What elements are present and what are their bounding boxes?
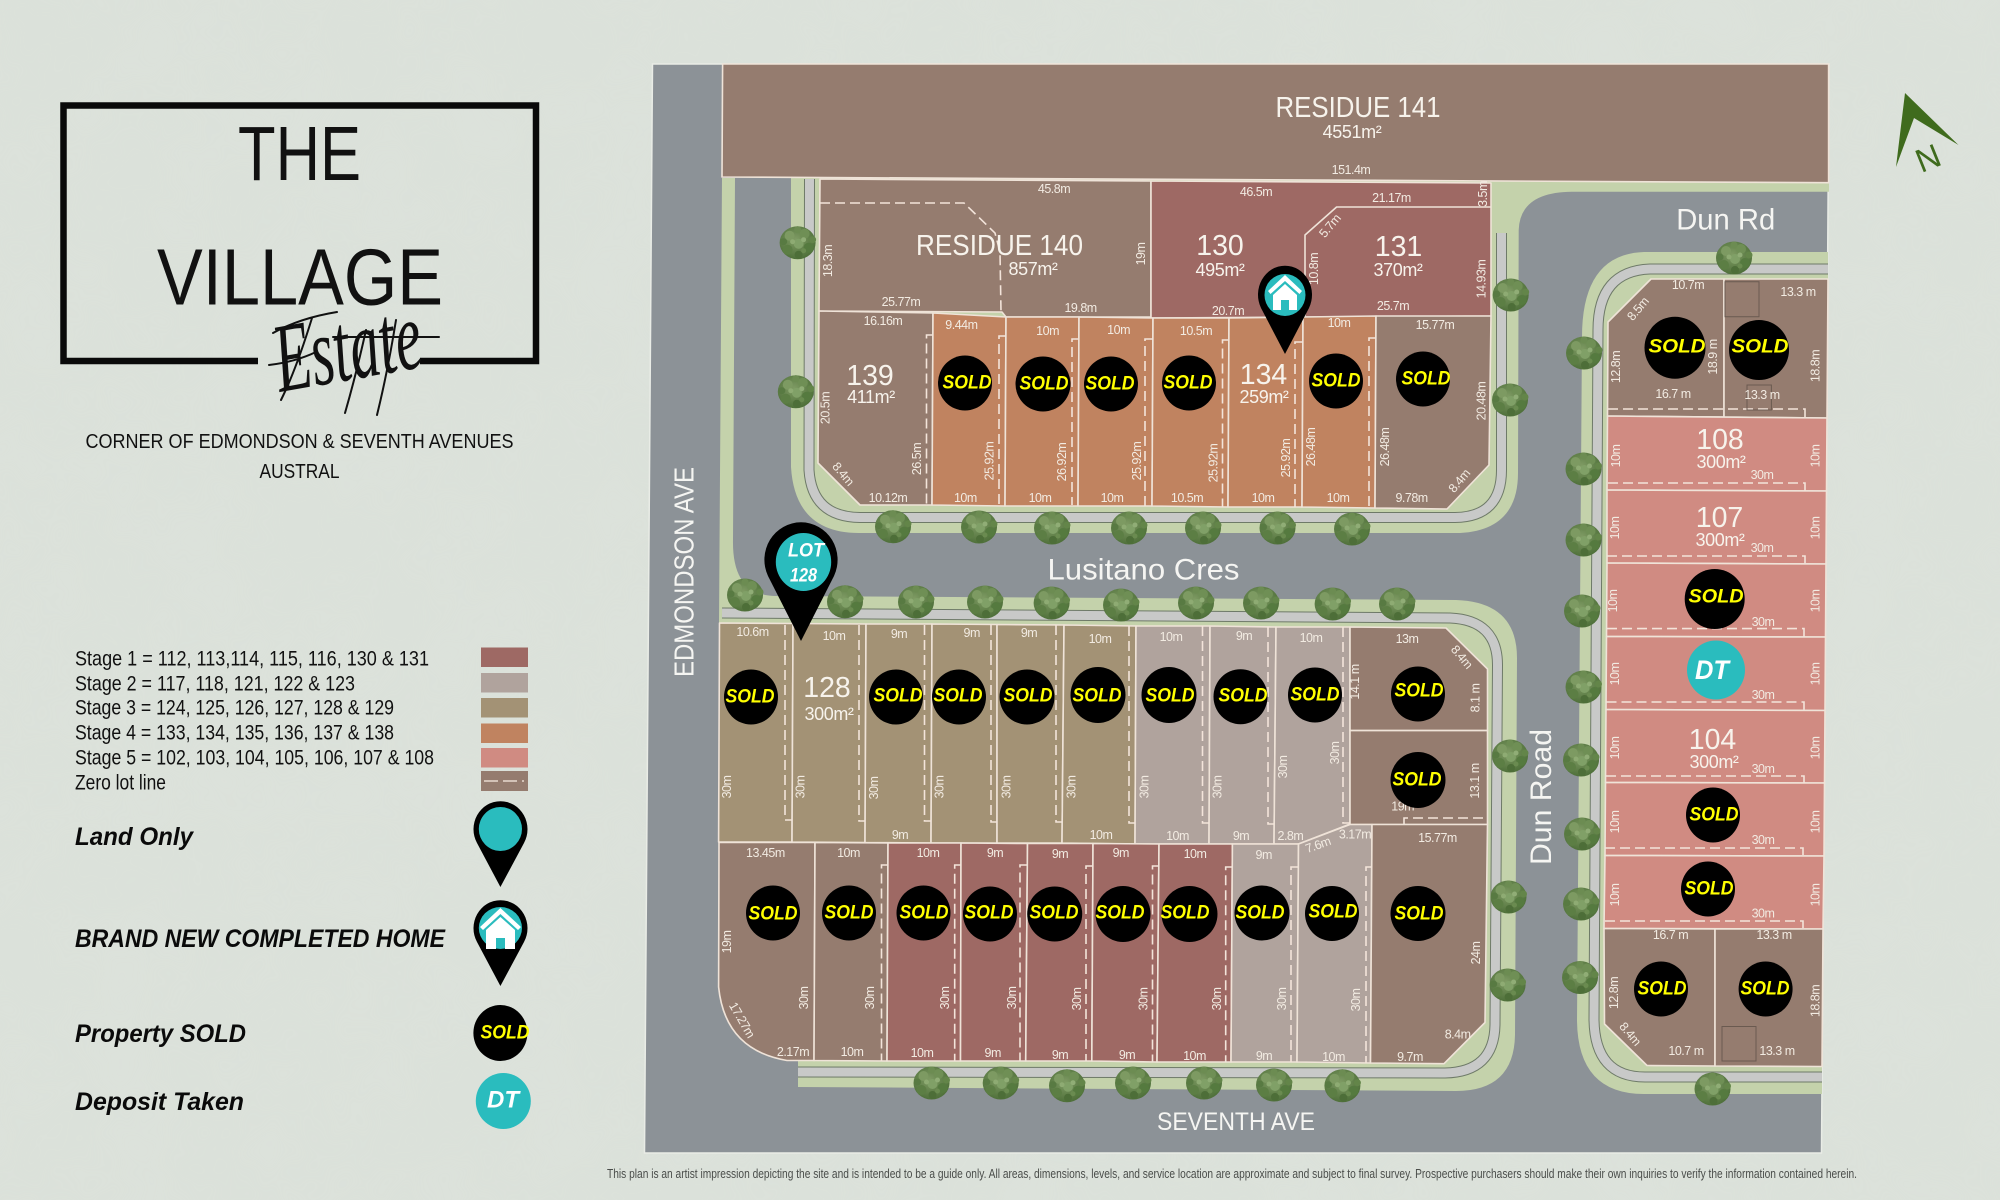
title: THE: THE xyxy=(238,111,361,197)
lot dimensions: 30m xyxy=(1211,776,1225,798)
lot dimensions: 10m xyxy=(1183,1049,1206,1063)
lot dimensions: 12.8m xyxy=(1607,977,1621,1009)
lot dimensions: 10m xyxy=(1322,1050,1345,1064)
lots: bottom block row 2 xyxy=(719,824,1488,1064)
lot dimensions: 30m xyxy=(1752,615,1774,629)
lot dimensions: 15.77m xyxy=(1416,318,1454,332)
lot dimensions: 10m xyxy=(1809,737,1823,759)
verge and footpath: bottom block xyxy=(719,178,1517,1091)
legend: land only xyxy=(75,801,527,887)
lot dimensions: 14.1 m xyxy=(1348,664,1362,700)
lot dimensions: 10.5m xyxy=(1171,491,1203,505)
lot dimensions: 10m xyxy=(1809,517,1823,539)
lot: residue 140 xyxy=(819,179,1151,317)
legend: stage 3: Stage 3 = 124, 125, 126, 127, 128 & 129 xyxy=(75,696,394,720)
lot dimensions: 19m xyxy=(720,931,734,953)
sold badge: row 2 lot 6 xyxy=(1096,886,1150,942)
lot dimensions: 10.7 m xyxy=(1668,1044,1704,1058)
sold badge: lot 106: SOLD xyxy=(1688,586,1744,608)
sold badge: row 1 upper corner xyxy=(1391,666,1445,722)
lot dimensions: 26.48m xyxy=(1378,428,1392,466)
lot dimensions: 13.3 m xyxy=(1756,928,1792,942)
lot dimensions: 30m xyxy=(1070,988,1084,1010)
lot dimensions: 10m xyxy=(1328,316,1350,330)
lot dimensions: 25.7m xyxy=(1377,299,1409,313)
lot dimensions: 12.8m xyxy=(1609,351,1623,383)
lot dimensions: 18.9 m xyxy=(1706,339,1720,375)
sold badge: row 2 lot 6: SOLD xyxy=(1096,902,1145,924)
lot dimensions: 2.8m xyxy=(1278,829,1303,843)
lot dimensions: 30m xyxy=(1210,988,1224,1010)
sold badge: row 2 lot 2: SOLD xyxy=(824,902,874,924)
lot dimensions: 151.4m xyxy=(1332,163,1370,177)
lot dimensions: 46.5m xyxy=(1240,185,1272,199)
legend: zero lot line: Zero lot line xyxy=(75,772,166,794)
lot numbers and areas: RESIDUE 141 xyxy=(1276,92,1440,124)
legend: deposit taken: Deposit Taken xyxy=(75,1088,244,1116)
lot dimensions: 9.44m xyxy=(945,318,978,332)
lot dimensions: 9.7m xyxy=(1397,1050,1423,1064)
lot dimensions: 30m xyxy=(1137,988,1151,1010)
lot numbers and areas: 128 xyxy=(803,672,851,704)
lot dimensions: 8.5m xyxy=(1624,295,1652,323)
lot dimensions: 10m xyxy=(1809,445,1823,467)
lot dimensions: 7.6m xyxy=(1303,834,1333,856)
lot dimensions: 13.3 m xyxy=(1744,388,1780,402)
lot dimensions: 26.48m xyxy=(1304,428,1318,466)
legend: deposit taken: DT xyxy=(487,1086,521,1114)
lot dimensions: 10.6m xyxy=(736,625,769,639)
lot dimensions: 20.5m xyxy=(819,392,833,424)
sold badge: row 2 lot 3: SOLD xyxy=(900,902,949,924)
sold badge: lot 102: SOLD xyxy=(1684,878,1734,900)
lot dimensions: 18.8m xyxy=(1809,985,1823,1017)
lot numbers and areas: 411m² xyxy=(847,387,895,407)
lot dimensions: 30m xyxy=(1751,541,1773,555)
legend: property sold: SOLD xyxy=(480,1022,530,1044)
legend xyxy=(75,648,531,1129)
sold badge: row 1 lot 4 xyxy=(932,670,986,724)
title frame xyxy=(64,106,536,361)
sold badge: top row lot 4 xyxy=(1162,356,1216,410)
legend: property sold: Property SOLD xyxy=(75,1020,246,1048)
lot dimensions: 25.77m xyxy=(882,295,920,309)
title: Estate script xyxy=(264,282,439,415)
street trees xyxy=(727,226,1752,1105)
sold badge: row 1 lot 9: SOLD xyxy=(1290,684,1340,706)
lot dimensions: 10m xyxy=(1608,811,1622,833)
lot dimensions: 30m xyxy=(1751,468,1773,482)
map pin: lot 128 land only xyxy=(764,522,838,641)
lot dimensions: 10m xyxy=(837,846,860,860)
lot dimensions: 10m xyxy=(1327,491,1349,505)
lot dimensions: 2.17m xyxy=(777,1045,809,1059)
lot dimensions: 10m xyxy=(1090,828,1112,842)
sold badge: row 2 lot 7 xyxy=(1160,886,1218,942)
lot numbers and areas: 259m² xyxy=(1239,387,1289,407)
lot dimensions: 30m xyxy=(797,987,811,1009)
sold badge: right block top left: SOLD xyxy=(1648,336,1706,358)
sold badge: row 2 lot 1 xyxy=(746,886,800,940)
lot dimensions: 10m xyxy=(1606,590,1620,612)
lot dimensions: 25.92m xyxy=(1207,444,1221,482)
map pin: lot 128 land only: LOT xyxy=(788,540,825,562)
lots: top row stage 4 xyxy=(818,311,1491,509)
lot dimensions: 8.4m xyxy=(1446,467,1473,495)
lot dimensions: 30m xyxy=(1752,833,1774,847)
lot dimensions: 10m xyxy=(1809,811,1823,833)
sold badge: row 1 lot 3: SOLD xyxy=(874,686,923,706)
lot numbers and areas: 300m² xyxy=(804,704,854,724)
sold badge: lot 102 xyxy=(1681,862,1735,916)
suburb line: AUSTRAL xyxy=(260,461,340,483)
sold badge: row 2 lot 4 xyxy=(963,886,1017,942)
lot dimensions: 20.7m xyxy=(1212,304,1244,318)
sold badge: row 1 lot 6: SOLD xyxy=(1072,686,1122,706)
lot dimensions: 30m xyxy=(794,776,808,798)
sold badge: row 2 lot 5 xyxy=(1027,886,1082,942)
lot dimensions: 10m xyxy=(823,629,845,643)
lot dimensions: 26.92m xyxy=(1055,443,1069,481)
lot dimensions: 10m xyxy=(1160,630,1182,644)
legend: brand new completed home xyxy=(75,900,527,986)
road base xyxy=(644,64,1829,1153)
sold badge: row 1 lot 7 xyxy=(1142,667,1196,723)
lot dimensions: 10.8m xyxy=(1307,253,1321,285)
lot dimensions: 10m xyxy=(1608,517,1622,539)
lot dimensions: 9m xyxy=(1256,1049,1272,1063)
lot dimensions: 10.7m xyxy=(1672,278,1704,292)
legend: property sold xyxy=(75,1005,530,1061)
lot dimensions: 13.45m xyxy=(746,846,785,860)
legend: brand new completed home: BRAND NEW COMPLETED HOME xyxy=(75,925,446,953)
map pin: brand new completed home on lot 134 xyxy=(1258,266,1312,354)
lot dimensions: 10m xyxy=(1608,737,1622,759)
verge and footpath: top block xyxy=(791,178,1829,533)
sold badge: row 1 lot 3 xyxy=(869,670,923,724)
lot dimensions: 30m xyxy=(1752,906,1774,920)
lot dimensions: 9m xyxy=(1113,846,1129,860)
map pin: lot 128 land only: 128 xyxy=(790,566,817,586)
sold badge: right block top right: SOLD xyxy=(1732,336,1789,358)
legend: stage 2: Stage 2 = 117, 118, 121, 122 & 123 xyxy=(75,672,355,696)
sold badge: row 2 lot 4: SOLD xyxy=(964,902,1014,924)
lot dimensions: 10m xyxy=(1101,491,1123,505)
verge and footpath: right block xyxy=(1577,252,1828,1094)
sold badges xyxy=(724,317,1793,1016)
lot dimensions: 19m xyxy=(1134,243,1148,265)
lot numbers and areas: RESIDUE 140 xyxy=(916,230,1083,262)
sold badge: row 2 lot 2 xyxy=(822,886,876,940)
sold badge: right block lower right: SOLD xyxy=(1740,978,1790,1000)
lot dimensions: 10m xyxy=(1184,847,1206,861)
lot dimensions: 9m xyxy=(1256,848,1272,862)
lot numbers and areas: 134 xyxy=(1240,359,1287,391)
sold badge: row 2 lot 9: SOLD xyxy=(1308,902,1358,922)
road names xyxy=(668,204,1775,1136)
sold badge: row 1 upper corner: SOLD xyxy=(1394,680,1444,702)
deposit taken badge: lot 105: DT xyxy=(1695,655,1731,685)
sold badge: top row lot 6: SOLD xyxy=(1312,370,1361,392)
lot dimensions: 30m xyxy=(1138,776,1152,798)
sold badge: row 1 lot 1 xyxy=(724,670,778,724)
sold badge: top row corner lot: SOLD xyxy=(1402,368,1451,390)
lot dimensions: 9m xyxy=(1052,847,1068,861)
sold badge: right block top left xyxy=(1644,317,1706,379)
lot dimensions: 10m xyxy=(1809,590,1823,612)
lot dimensions: 9m xyxy=(1052,1048,1068,1062)
lot dimensions: 10.12m xyxy=(869,491,907,505)
lot dimensions: 8.4m xyxy=(1616,1020,1644,1048)
lot numbers and areas: 131 xyxy=(1375,231,1422,263)
lot dimensions: 17.27m xyxy=(726,1000,758,1040)
lot dimensions: 16.16m xyxy=(864,314,902,328)
title: Estate script: Estate xyxy=(264,282,430,414)
lot dimensions: 5.7m xyxy=(1316,212,1344,240)
lot dimensions: 13m xyxy=(1396,632,1418,646)
sold badge: top row lot 3 xyxy=(1084,356,1138,412)
lot numbers and areas: 104 xyxy=(1689,724,1736,756)
lot dimensions: 19m xyxy=(1391,800,1414,814)
lot dimensions: 10m xyxy=(1809,884,1823,906)
sold badge: top row lot 1: SOLD xyxy=(942,372,992,394)
lot dimensions: 14.93m xyxy=(1475,260,1489,298)
lot dimensions: 9m xyxy=(1021,626,1037,640)
lot dimensions: 20.48m xyxy=(1475,382,1489,420)
sold badge: row 1 lot 5: SOLD xyxy=(1004,686,1053,706)
sold badge: top row lot 1 xyxy=(938,356,992,410)
lot numbers and areas: 300m² xyxy=(1689,752,1739,772)
lot dimensions: 30m xyxy=(867,777,881,799)
lot dimensions: 8.4m xyxy=(1448,643,1475,671)
lot numbers and areas: 107 xyxy=(1696,502,1743,534)
lot dimensions: 18.8m xyxy=(1809,350,1823,382)
lot dimensions: 13.1 m xyxy=(1468,763,1482,799)
lots: right block xyxy=(1604,279,1828,1066)
sold badge: lot 103 xyxy=(1686,788,1740,842)
lot dimensions: 13.3 m xyxy=(1780,285,1816,299)
lot numbers and areas: 108 xyxy=(1696,424,1744,456)
legend: stage 1: Stage 1 = 112, 113,114, 115, 116, 130 & 131 xyxy=(75,648,429,670)
sold badge: row 1 lot 9 xyxy=(1288,668,1342,722)
lot dimensions: 10m xyxy=(1608,884,1622,906)
lot dimensions: 15.77m xyxy=(1418,831,1457,845)
lot dimensions: 25.92m xyxy=(1130,442,1144,480)
sold badge: top row lot 6 xyxy=(1309,354,1363,408)
lot dimensions: 30m xyxy=(1275,988,1289,1010)
lot dimensions: 8.4m xyxy=(1445,1028,1471,1042)
legend: stage 4: Stage 4 = 133, 134, 135, 136, 137 & 138 xyxy=(75,722,394,744)
road name: Edmondson Ave: EDMONDSON AVE xyxy=(668,467,700,677)
site plan map xyxy=(644,64,1829,1153)
road name: Dun Road: Dun Road xyxy=(1525,729,1558,865)
sold badge: top row lot 2 xyxy=(1016,356,1070,412)
lot dimensions: 10m xyxy=(911,1046,933,1060)
sold badge: row 1 lot 8 xyxy=(1214,669,1268,724)
lot dimensions: 9m xyxy=(891,627,907,641)
north arrow xyxy=(1896,93,1958,180)
lot dimensions: 10m xyxy=(1609,445,1623,467)
sold badge: top row lot 3: SOLD xyxy=(1086,374,1135,394)
lot numbers and areas: 300m² xyxy=(1695,530,1745,550)
lot numbers and areas: 4551m² xyxy=(1323,122,1382,142)
lot dimensions: 10m xyxy=(1029,491,1051,505)
lot dimensions: 10m xyxy=(1036,324,1059,338)
sold badge: row 2 lot 8: SOLD xyxy=(1236,902,1285,924)
lot dimensions: 30m xyxy=(1005,987,1019,1009)
sold badge: row 1 lot 1: SOLD xyxy=(726,686,775,708)
sold badge: row 1 lower corner: SOLD xyxy=(1392,770,1442,790)
lot dimensions: 9m xyxy=(987,846,1003,860)
lot dimensions: 10m xyxy=(1089,632,1111,646)
sold badge: row 2 lot 3 xyxy=(896,886,950,940)
lot dimensions: 30m xyxy=(720,776,734,798)
sold badge: row 2 lot 7: SOLD xyxy=(1160,902,1210,924)
lot dimensions: 3.17m xyxy=(1339,828,1371,842)
lot dimensions: 30m xyxy=(1000,776,1014,798)
title: VILLAGE: VILLAGE xyxy=(157,232,443,322)
lot numbers and areas: 139 xyxy=(846,360,894,392)
lot dimensions: 9.78m xyxy=(1395,491,1428,505)
lot dimensions: 24m xyxy=(1469,942,1483,964)
lot numbers and areas: 495m² xyxy=(1195,260,1245,280)
lots: 130 and 131 xyxy=(1151,181,1491,318)
lot dimensions: 30m xyxy=(1276,756,1290,778)
sold badge: row 1 lower corner xyxy=(1390,752,1446,808)
lot dimensions: 9m xyxy=(1119,1048,1135,1062)
lot dimensions: 3.5m xyxy=(1476,181,1490,207)
sold badge: row 2 lot 5: SOLD xyxy=(1030,902,1079,924)
lot dimensions: 10m xyxy=(1252,491,1274,505)
lot dimensions: 30m xyxy=(933,776,947,798)
sold badge: right block lower left: SOLD xyxy=(1638,978,1687,1000)
sold badge: row 2 corner xyxy=(1390,886,1446,941)
lot dimensions: 10m xyxy=(1809,663,1823,685)
lot dimensions: 30m xyxy=(1752,688,1774,702)
lot dimensions: 26.5m xyxy=(910,443,924,475)
lot dimensions: 30m xyxy=(938,987,952,1009)
sold badge: row 2 corner: SOLD xyxy=(1394,904,1444,924)
lot dimensions: 16.7 m xyxy=(1655,387,1691,401)
sold badge: right block top right xyxy=(1729,320,1789,380)
sold badge: top row lot 4: SOLD xyxy=(1164,372,1213,394)
lot dimensions: 10m xyxy=(1300,631,1322,645)
sold badge: row 2 lot 9 xyxy=(1305,886,1359,941)
legend: stage 5: Stage 5 = 102, 103, 104, 105, 106, 107 & 108 xyxy=(75,746,434,770)
lot dimensions: 8.1 m xyxy=(1468,684,1482,712)
lot: residue 141 xyxy=(722,64,1829,183)
lot dimensions: 19.8m xyxy=(1064,301,1097,315)
sold badge: lot 103: SOLD xyxy=(1690,804,1739,826)
road name: Seventh Ave: SEVENTH AVE xyxy=(1157,1108,1315,1136)
lot dimensions: 9m xyxy=(1233,829,1249,843)
lot dimensions: 25.92m xyxy=(983,442,997,480)
sold badge: row 1 lot 8: SOLD xyxy=(1218,686,1268,706)
sold badge: row 2 lot 8 xyxy=(1234,886,1290,940)
road name: Lusitano Cres: Lusitano Cres xyxy=(1048,554,1240,586)
lot dimensions: 10m xyxy=(1107,323,1130,337)
sold badge: row 2 lot 1: SOLD xyxy=(748,904,798,924)
sold badge: right block lower left xyxy=(1634,962,1688,1016)
lot dimensions: 10.5m xyxy=(1180,324,1212,338)
sold badge: top row corner lot xyxy=(1396,352,1451,406)
lot dimensions: 10m xyxy=(954,491,977,505)
lot dimensions: 9m xyxy=(1236,629,1252,643)
sold badge: right block lower right xyxy=(1739,962,1793,1016)
lot dimensions: 10m xyxy=(1166,829,1189,843)
sold badge: row 1 lot 4: SOLD xyxy=(934,686,983,706)
lot dimensions: 30m xyxy=(863,987,877,1009)
lot dimensions: 10m xyxy=(841,1045,863,1059)
lot dimensions: 9m xyxy=(892,828,908,842)
lot dimensions: 30m xyxy=(1328,742,1342,764)
lot dimensions: 10m xyxy=(917,846,939,860)
lot dimensions: 21.17m xyxy=(1372,191,1411,205)
sold badge: row 1 lot 6 xyxy=(1070,667,1126,723)
lot numbers and areas: 857m² xyxy=(1008,259,1058,279)
lot dimensions: 30m xyxy=(1752,762,1774,776)
legend: zero lot line xyxy=(75,771,528,794)
lot dimensions: 30m xyxy=(1349,989,1363,1011)
address line: CORNER OF EDMONDSON & SEVENTH AVENUES xyxy=(86,431,514,453)
sold badge: lot 106 xyxy=(1685,569,1745,629)
lot numbers and areas: 370m² xyxy=(1373,260,1423,280)
legend: deposit taken xyxy=(75,1073,531,1129)
sold badge: row 1 lot 7: SOLD xyxy=(1146,686,1195,706)
lot dimensions: 16.7 m xyxy=(1653,928,1688,942)
lot dimensions: 10m xyxy=(1608,663,1622,685)
north arrow: N xyxy=(1910,136,1946,180)
deposit taken badge: lot 105 xyxy=(1687,640,1745,700)
lot numbers and areas: 300m² xyxy=(1696,452,1746,472)
lot dimensions: 13.3 m xyxy=(1759,1044,1795,1058)
sold badge: top row lot 2: SOLD xyxy=(1020,374,1069,394)
lots: bottom block row 1 xyxy=(719,623,1488,844)
title block: The Village Estate xyxy=(64,106,536,483)
lot dimensions: 25.92m xyxy=(1279,439,1293,477)
lot dimensions xyxy=(720,163,1823,1064)
lot dimensions: 45.8m xyxy=(1038,182,1070,196)
legend: land only: Land Only xyxy=(75,823,194,851)
lot dimensions: 9m xyxy=(985,1046,1001,1060)
road name: Dun Rd: Dun Rd xyxy=(1676,204,1775,236)
lot dimensions: 8.4m xyxy=(829,460,857,488)
lot numbers and areas xyxy=(803,92,1746,772)
lot dimensions: 30m xyxy=(1065,776,1079,798)
lot numbers and areas: 130 xyxy=(1196,230,1244,262)
sold badge: row 1 lot 5 xyxy=(1000,670,1054,724)
lot dimensions: 9m xyxy=(964,626,980,640)
lot dimensions: 18.3m xyxy=(821,245,835,277)
